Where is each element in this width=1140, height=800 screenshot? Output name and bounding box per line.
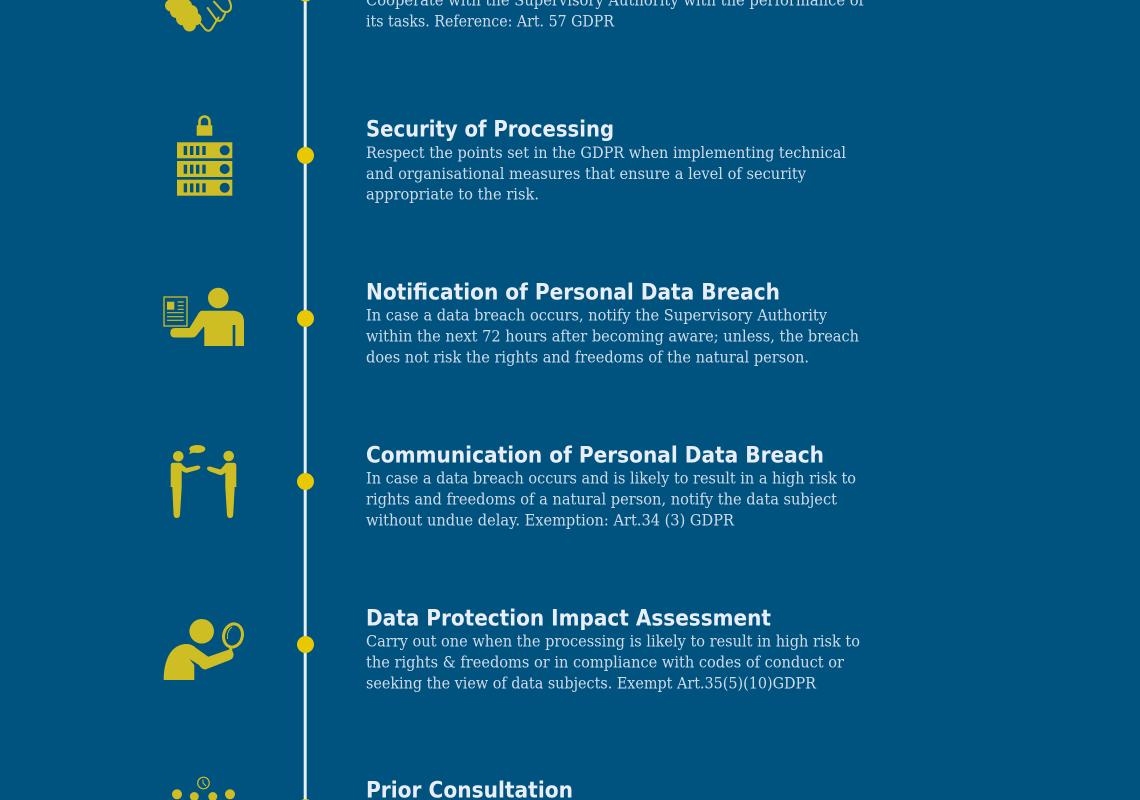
icon: two people talking	[171, 445, 236, 518]
text: dpia description	[366, 632, 860, 693]
icon: padlock and server stack	[177, 117, 232, 196]
text: security description	[366, 143, 846, 204]
text: security description: appropriate to the risk.	[366, 185, 539, 204]
text: notification description: does not risk the rights and freedoms of the natural person.	[366, 348, 809, 367]
text: communication description	[366, 469, 856, 530]
icon: clock above circles	[172, 777, 235, 800]
text: cooperation description	[366, 0, 865, 31]
text: dpia description: the rights & freedoms or in compliance with codes of conduct or	[366, 653, 844, 672]
panel: prior consultation	[172, 777, 573, 800]
text: notification description	[366, 306, 859, 367]
heading: dpia: Data Protection Impact Assessment	[366, 606, 771, 632]
icon: person with magnifying glass	[164, 619, 245, 680]
text: communication description: rights and freedoms of a natural person, notify the data subject	[366, 490, 838, 509]
text: dpia description: Carry out one when the processing is likely to result in high risk to	[366, 632, 860, 651]
timeline	[297, 0, 314, 800]
text: dpia description: seeking the view of data subjects. Exempt Art.35(5)(10)GDPR	[366, 674, 817, 693]
text: communication description: without undue delay. Exemption: Art.34 (3) GDPR	[366, 511, 735, 530]
panel: data protection impact assessment	[164, 606, 860, 693]
text: notification description: within the next 72 hours after becoming aware; unless, the breach	[366, 327, 859, 346]
text: communication description: In case a data breach occurs and is likely to result in a high risk to	[366, 469, 856, 488]
text: notification description: In case a data breach occurs, notify the Supervisory Authority	[366, 306, 827, 325]
panel: security of processing	[177, 116, 846, 204]
panel: communication of personal data breach	[171, 442, 856, 530]
panel: cooperation with the supervisory authority	[165, 0, 865, 31]
text: security description: and organisational measures that ensure a level of security	[366, 164, 806, 183]
heading: notification: Notification of Personal Data Breach	[366, 280, 780, 306]
text: security description: Respect the points set in the GDPR when implementing technical	[366, 143, 846, 162]
text: cooperation description: its tasks. Reference: Art. 57 GDPR	[366, 12, 615, 31]
icon: person presenting a document	[164, 288, 244, 346]
panel: notification of personal data breach	[164, 280, 859, 367]
icon: handshake	[165, 0, 231, 32]
heading: security of processing: Security of Processing	[366, 116, 614, 142]
heading: communication: Communication of Personal Data Breach	[366, 442, 824, 468]
